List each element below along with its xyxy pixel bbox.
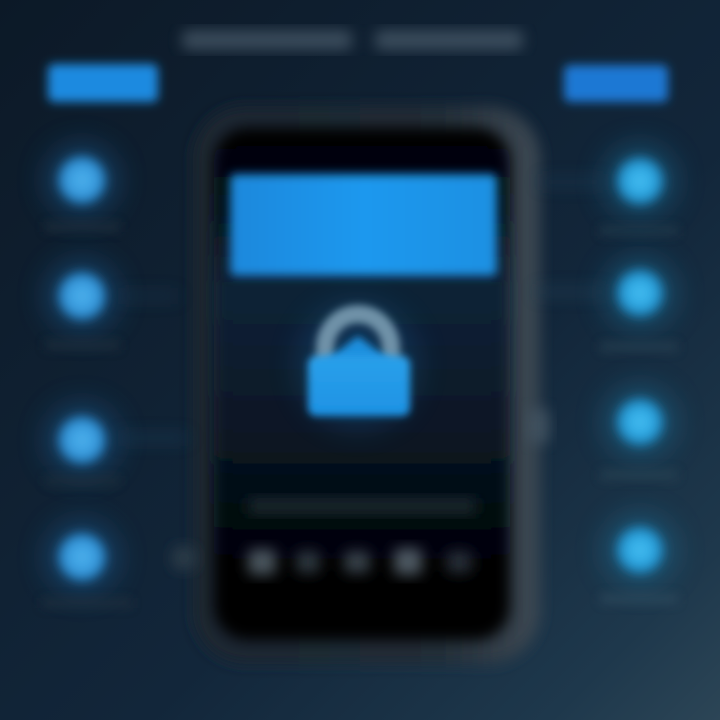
left feature 3 <box>45 404 120 486</box>
left connector lines <box>118 292 188 442</box>
right header pill <box>564 65 668 102</box>
left feature 1 <box>45 144 120 232</box>
padlock top wedge <box>316 336 400 368</box>
left feature 4 <box>42 521 132 608</box>
left feature 2 <box>45 260 120 350</box>
padlock shackle <box>325 314 391 372</box>
right feature 2 <box>600 257 678 352</box>
right feature 4 <box>600 514 678 604</box>
title <box>182 30 523 50</box>
passcode dots row <box>248 548 472 575</box>
phone side button <box>528 408 550 444</box>
padlock body <box>308 356 410 416</box>
left header pill <box>48 64 158 102</box>
screen text line <box>248 498 476 514</box>
right feature 3 <box>600 386 678 480</box>
icon: padlock <box>296 300 420 430</box>
right connector lines <box>536 178 606 296</box>
phone screen <box>214 128 510 640</box>
right feature column <box>600 145 678 604</box>
phone <box>193 106 550 664</box>
padlock glow <box>296 300 420 430</box>
screen banner <box>230 174 497 276</box>
left feature column <box>42 144 132 608</box>
phone body <box>193 106 540 664</box>
right feature 1 <box>600 145 678 236</box>
left connector node <box>171 545 197 571</box>
